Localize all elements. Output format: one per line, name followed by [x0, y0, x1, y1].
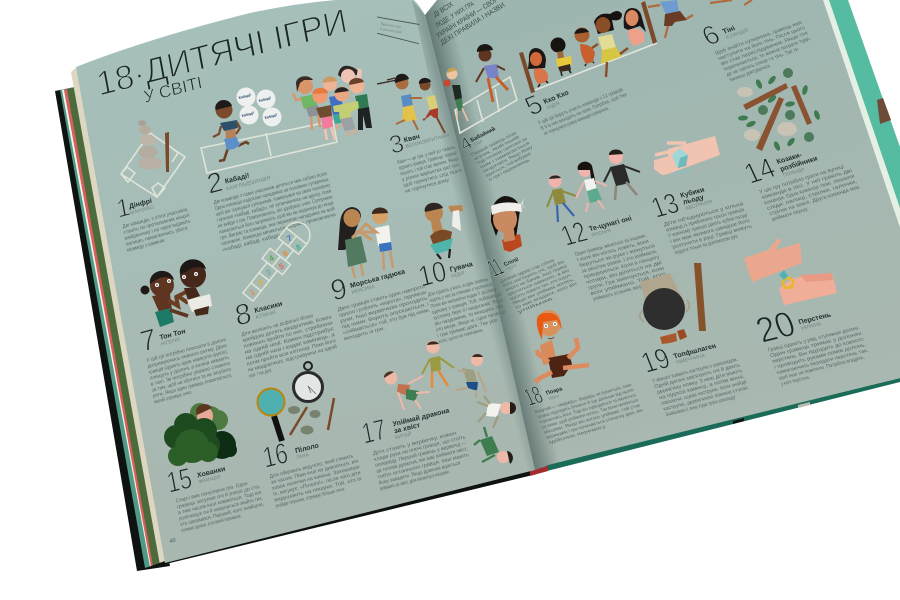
- book cover left edge: [55, 67, 170, 571]
- game 18 label: за ними, щоб упіймати когось. Так вони міняються: [540, 396, 639, 430]
- game 4 label: тоді починає ганятися за: [476, 136, 528, 165]
- game 20 label: УКРАЇНА: [800, 320, 823, 332]
- game 4 label: м'ячик, який інший: [472, 133, 521, 161]
- game 12 label: беруться за руки і женуться: [578, 243, 656, 269]
- game 2 illustration: kabaddi runner, bubbles, field, team: Кабаді!: [238, 93, 252, 100]
- game 16 label: 16: [260, 437, 291, 475]
- game 2 label: і кричав «кабаді, кабаді», не зупиняючись на вдиху, поки: [216, 188, 332, 224]
- game 9 label: 9: [328, 272, 350, 308]
- game 9 illustration: two children and sea snake game: [338, 207, 393, 278]
- game 15 label: Хованки: [197, 466, 226, 480]
- game 8 illustration: hopscotch: 6: [281, 248, 290, 258]
- kid D: [334, 86, 350, 102]
- game 10 label: Діти сідають у коло, а один гравець: [427, 276, 489, 298]
- title: 18·ДИТЯЧІ ІГРИ: [94, 2, 350, 104]
- game 16 label: Діти обирають ведучого, який стежить: [269, 452, 354, 480]
- game 14 illustration: sticks, leaves, melons and stones: [737, 68, 821, 152]
- game 1 label: [114, 178, 193, 255]
- game 18 label: ведмедем і гра починається спочатку далі, він: [545, 407, 644, 440]
- game 14 label: стрілки на землі. Друга команда має: [768, 184, 861, 217]
- game 9 label: МЕКСИКА: [351, 284, 376, 296]
- game 8 illustration: hopscotch: 7: [285, 233, 294, 243]
- game 7 label: Тон Тон: [159, 328, 186, 342]
- game 15 label: ФРАНЦІЯ: [198, 474, 221, 485]
- game 20 label: [750, 288, 874, 388]
- game 19 label: НІМЕЧЧИНА: [675, 353, 707, 366]
- game 4 label: вдається, той вибуває: [484, 150, 533, 178]
- game 6 label: [696, 0, 818, 84]
- game 12 label: І коли він когось ловить, вони: [576, 239, 650, 263]
- game 4 label: [456, 111, 540, 183]
- game 17 label: 17: [359, 414, 389, 451]
- game 12 illustration: three children holding hands: [547, 149, 640, 222]
- game 20 label: Один гравець тримає у долонях: [769, 331, 863, 359]
- game 19 label: повзаючи, шукає каструлю. Коли знайде: [660, 378, 748, 407]
- game 5 label: [519, 58, 631, 138]
- game 12 label: 12: [557, 217, 592, 253]
- game 19 label: [637, 327, 752, 419]
- right page: [425, 0, 900, 470]
- game 15 label: починає шукати, а останній перемагає.: [181, 512, 242, 534]
- game 11 illustration: blindfolded girl: [491, 196, 526, 252]
- game 7 label: гравців сідають одне навпроти одного,: [148, 349, 228, 376]
- game 19 label: Топфшлаген: [673, 343, 717, 360]
- game 14 label: команди в лісі. У неї грають дві: [761, 168, 853, 201]
- game 10 label: Гувача: [449, 261, 474, 274]
- game 3 illustration: two runners: [377, 74, 445, 133]
- game 4 illustration: hopscotch and players: [444, 44, 517, 133]
- game 3 label: [386, 116, 464, 196]
- game 5 label: У цій грі беруть участь команди з 12 гравців.: [537, 86, 625, 126]
- game 16 label: Пілоло: [295, 441, 319, 455]
- game 14 label: ПОЛЬЩА: [782, 167, 806, 179]
- game 2 label: половині. Команди міняються місцями, промовляючи: [221, 212, 336, 247]
- game 18 label: торкаючись його. Тоді він підводиться та женеться: [538, 391, 637, 425]
- game 1 label: палицю, намагаючись збити: [125, 225, 188, 248]
- game 6 label: Тіні: [721, 24, 737, 36]
- game 20 label: Перстень: [798, 312, 833, 326]
- game 6 label: ІСЛАНДІЯ: [725, 27, 750, 41]
- game 12 label: Те-цунагі оні: [588, 214, 633, 233]
- game 8 label: нозі. І так далі.: [248, 367, 273, 380]
- game 7 label: інший отримує очко.: [153, 388, 193, 406]
- game 17 label: за хвіст: [393, 421, 421, 435]
- game 5 illustration: kho-kho row and runner: [519, 0, 752, 93]
- game 15 label: розплющує очі й намагається знайти тих,: [178, 495, 263, 522]
- game 6 label: він стає переслідувачем. Якщо тіні: [720, 30, 809, 67]
- game 12 label: приєднуються. Коли в ланцюгу: [583, 254, 661, 280]
- game 10 illustration: seated child with handkerchief: [425, 203, 463, 259]
- game 9 label: «спіймається» той, хто був під ними,: [342, 306, 431, 336]
- game 19 label: У кімнаті ховають каструлю з шоколадом.: [651, 357, 739, 384]
- game 2 label: гри. Виграє та команда, яка перемагає нападника на всій: [220, 205, 335, 242]
- game 8 label: повинен пройти по них, стрибаючи: [243, 319, 333, 350]
- game 18 label: 18: [520, 381, 547, 412]
- game 2 label: намагаються його затримати, щоб він не подихнув до кінця: [218, 199, 334, 236]
- game 11 label: мусить ловити тих, хто поруч.: [509, 272, 573, 301]
- game 17 label: Діти стають у вервечку, кожен: [373, 430, 457, 457]
- game 4 label: 4: [456, 133, 476, 154]
- game 11 label: упіймав.: [516, 294, 556, 314]
- game 17 label: тобто останнього гравця. Інші мають: [377, 452, 470, 481]
- game 2 label: щоб він торкнувся суперників, повернувся на свою половину: [215, 182, 331, 218]
- game 7 label: дотримуючись певного ритму. Двоє: [147, 343, 228, 370]
- game 17 label: [359, 395, 472, 494]
- game 17 label: йому завадити. Якщо дракона вдасться: [378, 459, 461, 487]
- game 1 label: МАРОККО: [130, 204, 154, 217]
- game 7 label: У цій грі потрібно плескати в долоні: [146, 336, 226, 364]
- game 6 label: зможеш урятуватися.: [728, 63, 773, 83]
- game 8 label: [233, 277, 339, 380]
- game 19 label: 19: [637, 343, 675, 380]
- game 16 label: ховає палички на камінці. Заховавши: [272, 464, 360, 492]
- game 4 label: Перший гравець сіпає: [469, 129, 518, 157]
- game 1 label: стають по протилежних кінцях: [123, 212, 190, 236]
- runner: [213, 100, 249, 161]
- page number 40: 40: [169, 538, 176, 545]
- back girl: [338, 66, 361, 80]
- game 8 label: Класики: [254, 301, 283, 315]
- game 10 label: одному з гравців. Той, побачивши: [431, 290, 502, 316]
- game 11 label: Дитячий одразу стає сліпим: [498, 257, 555, 284]
- game 14 label: сліди: палиці, стрілки, галочки,: [766, 179, 858, 212]
- game 2 label: [204, 139, 338, 254]
- game 6 label: Щоб знайти суперника, гравець має: [714, 19, 804, 57]
- game 14 label: [739, 132, 864, 224]
- game 6 label: наступити на його тінь. Після цього: [717, 24, 806, 62]
- game 18 label: гравці підходять ближче й ще дальше від нього: [536, 386, 635, 419]
- game 3 label: у різних варіантах цієї гри,: [401, 162, 461, 183]
- game 17 label: Упіймай дракона: [392, 406, 450, 428]
- game 1 label: 1: [114, 193, 132, 224]
- game 4 label: наздогнати. Якщо йому: [481, 143, 534, 174]
- game 19 illustration: pot, stick and chocolate: [640, 263, 706, 344]
- game 10 label: хустинку, бере її і наздоганяє. Якщо: [433, 297, 504, 322]
- game 8 illustration: hopscotch: [238, 217, 315, 305]
- game 16 label: [260, 421, 364, 510]
- game 7 label: НІГЕРІЯ: [160, 337, 181, 348]
- kid F: [350, 78, 364, 94]
- game 7 label: в такт. Їм потрібно уважно стежити: [150, 360, 231, 388]
- game 18 label: Ведучий — «ведмідь». Ведмідь не рухається, поки: [534, 381, 632, 414]
- game 15 label: [164, 446, 266, 535]
- callout top right of left page: в усьому світі: [380, 27, 403, 35]
- game 9 label: Морська гадюка: [350, 268, 406, 290]
- game 1 label: піраміду з каменів.: [126, 238, 166, 254]
- game 11 label: крутяться навколо, а він: [506, 268, 571, 297]
- game 7 label: за тим, щоб не збитися та не загубити: [151, 367, 232, 394]
- game 20 label: 20: [750, 303, 801, 350]
- game 11 label: Сліпі/: [503, 257, 521, 268]
- game 13 label: АВСТРАЛІЯ: [685, 199, 714, 212]
- game 12 label: за рештою разом. І хто впіймали,: [580, 248, 658, 275]
- game 11 label: то має вгадати, кого він: [514, 281, 578, 310]
- game 8 illustration: hopscotch: 8: [294, 242, 303, 252]
- game 11 label: його зав'язують очі, щоб він: [501, 258, 566, 288]
- game 18 label: ПЕРУ: [548, 393, 560, 401]
- game 8 label: на квадратиках, підстрибуючи на одній: [247, 343, 337, 374]
- game 10 label: ІНДІЯ: [451, 270, 465, 280]
- game 2 label: Кабаді!: [224, 171, 250, 186]
- game 3 label: ВЕЛИКОБРИТАНІЯ: [405, 132, 451, 150]
- game 15 illustration: child hiding in bush: [164, 403, 237, 466]
- game 18 illustration: orange-haired child: [535, 310, 589, 382]
- game 8 label: на одній нозі. Кожен підстрибує: [244, 325, 335, 356]
- game 20 label: перстень. Він підходить до кожного: [771, 336, 865, 365]
- game 2 label: не вийде з гри. Повернувшись, він здобуває очки. Суперники: [217, 193, 333, 230]
- game 10 label: Потім він непомітно кидає її за спину: [430, 287, 497, 310]
- game 12 label: упіймають останнім, виграє.: [592, 282, 648, 303]
- game 1 illustration: stones and stick: [121, 120, 185, 197]
- kid C: [312, 88, 328, 104]
- game 15 label: 15: [164, 462, 195, 500]
- game 10 label: ходить у них за спинами з хустинкою.: [429, 281, 494, 304]
- intro text on right page: ДІ ВСІХ: [432, 1, 455, 19]
- game 19 label: каструлю, дерев'яною ложкою стукає:: [663, 385, 750, 413]
- game 7 label: 7: [138, 323, 159, 359]
- game 18 label: [520, 357, 646, 446]
- game 12 label: ЯПОНІЯ: [591, 228, 612, 239]
- game 2 illustration: kabaddi runner, bubbles, field, team: Кабаді!: [241, 111, 255, 118]
- game 7 label: ритм. Якщо один гравець помиляється,: [152, 373, 233, 400]
- game 9 label: виходить із гри.: [344, 326, 385, 342]
- game 11 label: нічого не бачив. Інші гравці: [504, 263, 568, 292]
- game 9 label: [328, 252, 432, 343]
- game 13 label: [647, 172, 756, 257]
- game 17 label: це голова дракона, він має впіймати хвіст,: [376, 445, 468, 475]
- game 19 label: дерев'яну ложку. З нею діти мають: [656, 368, 744, 396]
- game 8 label: ІСПАНІЯ: [255, 309, 276, 321]
- game 4 label: Бабайний: [469, 125, 498, 144]
- game 6 label: перетинаються, то можна пограти туди,: [723, 36, 812, 73]
- game 12 label: [557, 201, 670, 304]
- game 17 illustration: dragon chain of children: [384, 340, 516, 464]
- game 13 label: подати тільки за допомогою рук.: [674, 233, 740, 256]
- game 5 label: не торкнулися гравці команди-суперника.: [543, 106, 610, 137]
- game 20 label: Гравці сідають у ряд, стуливши долоні.: [767, 325, 860, 354]
- callout top right of left page: [374, 17, 422, 44]
- game 10 label: і гра триває далі. Так усе: [437, 317, 498, 339]
- game 20 label: щоб інші не помітили. Потрібно вгадати,: [778, 355, 865, 382]
- game 17 label: попереду. Перший гравець у вервечці —: [375, 439, 468, 469]
- game 13 label: команд із приблизно трьох гравців.: [665, 207, 747, 234]
- team of children: [293, 66, 372, 140]
- game 13 illustration: hand with ice cube: [654, 136, 720, 175]
- game 3 label: не торкнутися дому.: [404, 177, 450, 195]
- game 13 label: розтопити в руці. Гравці можуть: [672, 224, 753, 250]
- game 5 label: В 9 із них виходять на поле. Потрібно, щоб тіки: [540, 92, 628, 132]
- subtitle: У СВІТІ: [142, 73, 204, 107]
- game 2 illustration: kabaddi runner, bubbles, field, team: Кабаді!: [264, 113, 278, 120]
- callout top right of left page: Вдалого гри: [381, 22, 401, 29]
- game 16 label: ГАНА: [296, 452, 310, 461]
- game 3 label: Квач: [403, 133, 421, 144]
- game 12 label: групи. Гра закінчується, коли: [587, 266, 665, 291]
- game 17 label: КИТАЙ: [394, 429, 412, 441]
- game 15 label: гравець затулює очі й рахує до ста,: [176, 483, 261, 510]
- game 3 label: іншого, і той стає квачем. Якщо: [400, 155, 459, 177]
- game 9 label: руки. Інші вервечкою проходять: [340, 295, 428, 325]
- game 20 label: намагаючись передати перстень так,: [776, 348, 869, 376]
- game 11 label: [483, 232, 581, 315]
- game 14 label: 14: [739, 153, 781, 190]
- game 10 label: він наздожене, то виходить той,: [434, 302, 505, 328]
- game 10 label: 10: [415, 255, 450, 294]
- game 14 label: впіймати першу.: [771, 205, 810, 223]
- game 18 label: здійснює перемогу.: [547, 423, 607, 445]
- game 1 label: майданчику і по черзі кидають: [124, 217, 191, 242]
- kid B blue: [323, 77, 337, 91]
- game 2 label: «кабаді, кабаді, кабаді».: [222, 232, 283, 253]
- game 13 label: льоду: [682, 194, 705, 206]
- game 20 illustration: hands with ring: [744, 238, 837, 305]
- game 9 label: Двоє гравців стають один навпроти: [337, 284, 426, 313]
- game 12 label: Один гравець женеться за іншими.: [574, 233, 648, 258]
- kid A: [297, 78, 313, 94]
- game 10 label: [415, 243, 509, 346]
- game 3 label: 3: [386, 129, 407, 160]
- game 16 label: вирушають на пошуки. Той, хто їх: [274, 475, 363, 504]
- game 7 label: [138, 305, 234, 406]
- game 1 label: Дінфрі: [128, 197, 153, 211]
- game 8 label: на одній нозі і кидає камінець, а: [245, 331, 335, 362]
- game 7 illustration: two children clapping: [140, 259, 212, 327]
- game 14 label: розбійники: [779, 155, 819, 173]
- game 8 label: 8: [233, 297, 254, 333]
- game 10 label: хто кинув. Якщо ні, сідає на місце: [436, 309, 506, 333]
- game 11 label: ПЕРУ: [505, 263, 518, 271]
- game 11 label: 11: [483, 253, 508, 282]
- game 5 label: Кхо Кхо: [543, 90, 570, 106]
- game 2 label: Одна команда надсилає нападника на половину суперника,: [214, 177, 330, 212]
- game 16 label: за часом. Поки інші не дивляться, він: [270, 458, 359, 486]
- game 2 illustration: kabaddi runner, bubbles, field, team: Кабаді!: [258, 96, 272, 103]
- game 11 label: Якщо він упіймає когось,: [511, 276, 575, 306]
- game 16 label: знайде першим, отримує більше очок.: [275, 485, 346, 510]
- game 20 label: у кого перстень.: [780, 375, 811, 387]
- game 8 illustration: hopscotch: 3: [264, 267, 273, 277]
- game 13 label: 13: [647, 188, 684, 225]
- game 19 label: на підлозі камінці, а потім вона,: [658, 374, 746, 401]
- game 3 label: щоб торкнутися, слід тікати: [403, 168, 463, 189]
- game 12 label: чотири, він ділиться на дві: [585, 260, 663, 286]
- game 19 label: Знайшовши її, вона з'їдає трохи шоколаду!: [664, 394, 737, 418]
- game 3 label: Квач — це гра, у якій усі тікають: [396, 143, 456, 166]
- game 2 label: 2: [204, 165, 225, 200]
- game 2 label: Дві команди з семи учасників діляться між собою поле.: [213, 171, 329, 206]
- game 2 illustration: kabaddi runner, bubbles, field, team: [201, 66, 372, 173]
- game 18 label: Поара: [545, 386, 565, 397]
- game 14 label: команди. Одна команда тікає, лишаючи: [763, 173, 856, 206]
- game 15 label: Старі і вже популярна гра. Один: [175, 481, 248, 505]
- game 17 label: впіймати за хвіст, діти міняються місцями.: [379, 468, 450, 492]
- game 13 label: Кубики: [679, 186, 706, 200]
- game 13 label: У кожному гравцю дають кубик льоду: [667, 212, 749, 239]
- game 15 label: а тим часом інші ховаються. Тоді він: [177, 490, 262, 516]
- game 14 label: У цю гру потрібно грати на вулиці: [758, 164, 845, 195]
- game 16 label: їх, вигукує: «Пілоло!», після чого діти: [272, 470, 361, 498]
- game 4 label: із гри і переможець.: [487, 157, 531, 182]
- game 9 label: одного і роблять «ворота», піднявши: [339, 290, 427, 319]
- game 8 label: потім пройти всю клітинку. Поки його: [246, 337, 336, 368]
- game 4 label: США: [472, 138, 484, 147]
- game 20 label: і проводить руками поміж долонь,: [774, 342, 867, 370]
- game 5 label: 5: [519, 88, 548, 121]
- game 1 label: Дві команди, з п'яти учасників,: [122, 207, 189, 230]
- game 13 label: Діти об'єднуються у кілька: [663, 201, 744, 228]
- game 15 label: хто заховався. Перший, кого знайшли,: [180, 500, 264, 528]
- game 8 illustration: hopscotch: 5: [277, 261, 286, 271]
- game 12 label: всіх упіймано. Той, кого: [589, 270, 667, 297]
- game 6 label: 6: [696, 19, 725, 51]
- game 4 label: ним і намагається: [479, 140, 531, 169]
- game 14 label: Козаки-: [776, 152, 804, 166]
- game 19 label: Одній дитині зав'язують очі й дають: [653, 361, 741, 390]
- game 6 label: де не світить сонце і є тінь. Так ти: [726, 47, 800, 78]
- game 5 label: ІНДІЯ: [546, 101, 561, 111]
- game 9 label: під ними. Ворота опускаються, і: [341, 301, 429, 331]
- game 13 label: і він має якомога швидше його: [669, 217, 751, 245]
- game 7 label: плещуть у долоні, а коліна кивають: [149, 355, 230, 382]
- game 18 label: місцями. Якщо він когось упіймає, той стає: [543, 401, 642, 435]
- game 8 illustration: hopscotch: 4: [267, 253, 276, 263]
- game 16 illustration: magnifier, stopwatch, stones, sticks: [258, 362, 334, 441]
- game 10 label: коло, цього не помічаючи.: [438, 327, 484, 345]
- game 8 label: Діти малюють на асфальті білою: [241, 313, 314, 338]
- left page: [76, 0, 535, 563]
- game 3 label: одного гравця. Гравець торкає: [398, 150, 458, 172]
- game 8 illustration: hopscotch: 2: [256, 277, 265, 287]
- game 17 label: кладе руки на плечі гравця, що стоїть: [374, 434, 466, 463]
- game 2 label: БАНГЛАДЕШ/ІНДІЯ: [226, 175, 271, 192]
- game 8 label: крейдою десять квадратиків. Кожен: [242, 313, 332, 344]
- game 8 illustration: hopscotch: 1: [248, 287, 257, 297]
